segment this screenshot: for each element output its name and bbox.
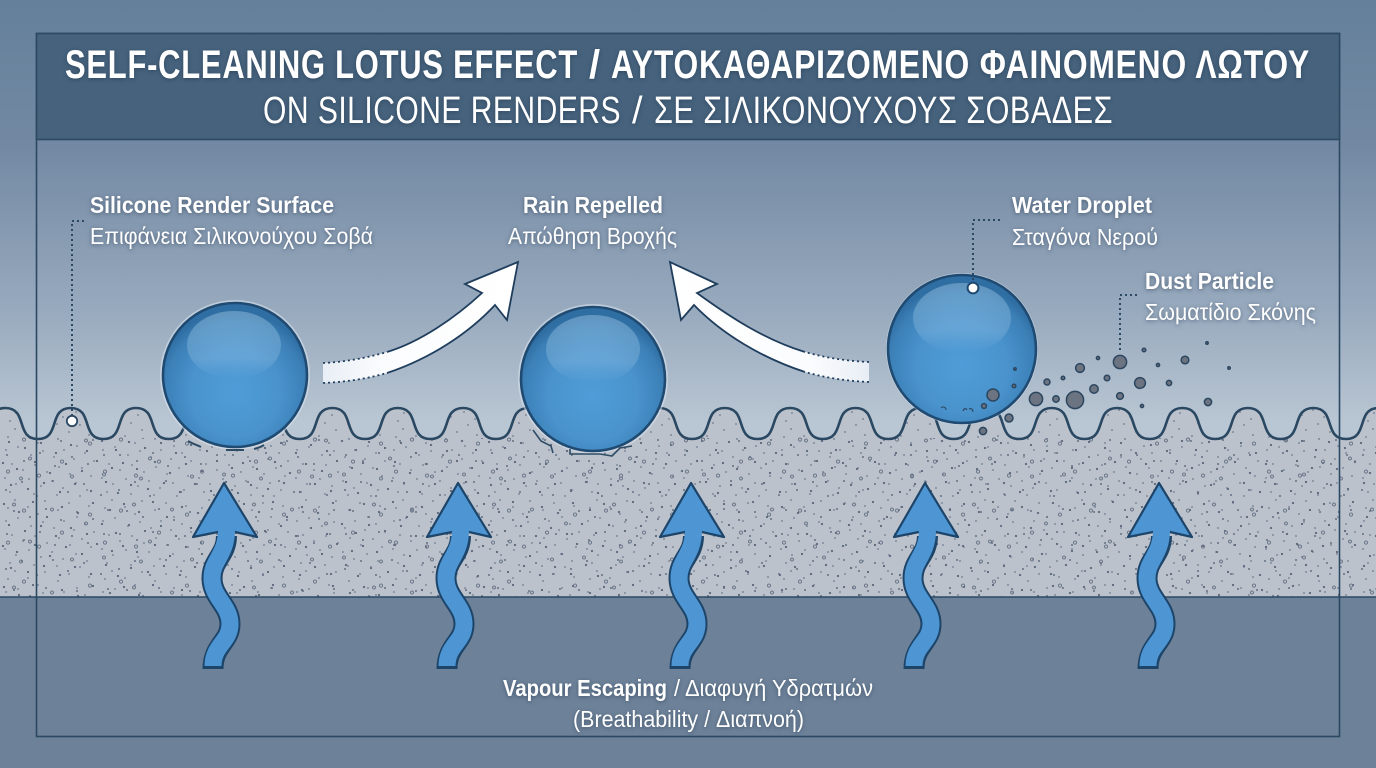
droplet 1 bbox=[160, 300, 310, 450]
vapour arrow 1 bbox=[193, 483, 257, 669]
droplet 2 bbox=[518, 304, 668, 456]
leader: dust particle bbox=[1120, 295, 1137, 353]
dust particles bbox=[979, 342, 1230, 435]
vapour arrow 3 bbox=[660, 483, 724, 669]
title text: ΣΕ ΣΙΛΙΚΟΝΟΥΧΟΥΣ ΣΟΒΑΔΕΣ bbox=[654, 90, 1113, 132]
label: rain repelled bbox=[508, 192, 677, 249]
droplet 3 collecting dust bbox=[886, 273, 1038, 425]
label: vapour escaping: / Διαφυγή Υδρατμών bbox=[674, 675, 873, 701]
render layer with lotus-effect surface bbox=[0, 408, 1376, 600]
label: water droplet bbox=[1012, 192, 1158, 250]
label: dust particle: Σωματίδιο Σκόνης bbox=[1145, 299, 1316, 325]
title text: / bbox=[589, 43, 600, 87]
arrow: rain repelled right bbox=[670, 262, 869, 382]
label: silicone render surface bbox=[90, 192, 373, 249]
title text bbox=[65, 43, 1310, 132]
substrate wall band bbox=[0, 597, 1376, 768]
title text: SELF-CLEANING LOTUS EFFECT bbox=[65, 43, 578, 87]
leader: silicone render surface bbox=[67, 221, 84, 426]
label: silicone render surface: Silicone Render Surface bbox=[90, 192, 334, 218]
arrow: rain repelled left bbox=[323, 262, 518, 383]
vapour arrow 2 bbox=[427, 483, 491, 669]
label: silicone render surface: Επιφάνεια Σιλικονούχου Σοβά bbox=[90, 223, 373, 249]
leader: water droplet bbox=[968, 220, 1000, 293]
label: water droplet: Water Droplet bbox=[1012, 192, 1152, 218]
label: rain repelled: Rain Repelled bbox=[523, 192, 663, 218]
label: vapour escaping bbox=[503, 675, 873, 732]
label: rain repelled: Απώθηση Βροχής bbox=[508, 223, 677, 249]
title banner bbox=[36, 34, 1340, 140]
title text: ON SILICONE RENDERS bbox=[263, 90, 621, 132]
title text: / bbox=[632, 90, 643, 132]
vapour arrow 4 bbox=[894, 483, 958, 669]
label: dust particle bbox=[1145, 268, 1316, 325]
vapour arrow 5 bbox=[1128, 483, 1192, 669]
label: water droplet: Σταγόνα Νερού bbox=[1012, 224, 1158, 250]
label: vapour escaping: (Breathability / Διαπνοή) bbox=[573, 706, 804, 732]
label: vapour escaping: Vapour Escaping bbox=[503, 675, 667, 701]
label: dust particle: Dust Particle bbox=[1145, 268, 1274, 294]
